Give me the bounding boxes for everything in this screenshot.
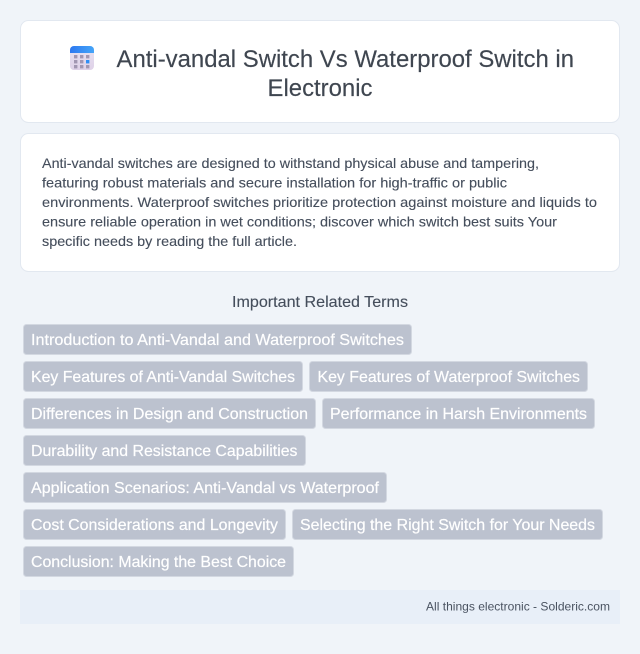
tag: conclusion: [24, 546, 294, 576]
title: Anti-vandal Switch Vs Waterproof Switch in: [116, 46, 574, 73]
tag: anti-vandal features: Key Features of Anti-Vandal Switches: [31, 369, 295, 386]
tag: cost: Cost Considerations and Longevity: [31, 517, 278, 534]
tag: conclusion: Conclusion: Making the Best Choice: [31, 554, 286, 571]
panel: term tags: [24, 324, 602, 576]
tag: harsh environments: Performance in Harsh Environments: [330, 406, 587, 423]
tag: application scenarios: [24, 472, 386, 502]
tag: harsh environments: [322, 398, 594, 428]
text block: description: specific needs by reading the full article.: [42, 233, 297, 249]
footer: All things electronic - Solderic.com: [426, 600, 610, 614]
tag: anti-vandal features: [24, 362, 302, 392]
title: Electronic: [268, 75, 372, 102]
panel: description card: [20, 134, 620, 272]
panel: title card: [20, 20, 620, 122]
tag: selecting: [292, 510, 602, 540]
heading: related terms: Important Related Terms: [232, 294, 408, 311]
tag: cost: [24, 510, 286, 540]
tag: waterproof features: [310, 362, 588, 392]
icon: calendar: [70, 46, 94, 70]
tag: design differences: Differences in Design and Construction: [31, 406, 308, 423]
tag: selecting: Selecting the Right Switch for Your Needs: [300, 517, 595, 534]
tag: application scenarios: Application Scenarios: Anti-Vandal vs Waterproof: [31, 480, 380, 497]
footer: [20, 590, 620, 624]
tag: durability: [24, 436, 306, 466]
text block: description: ensure reliable operation in wet conditions; discover which switch best suits Your: [42, 214, 557, 230]
text block: description: featuring robust materials and secure installation for high-traffic or public: [42, 174, 507, 190]
tag: durability: Durability and Resistance Capabilities: [31, 443, 298, 460]
tag: design differences: [24, 398, 316, 428]
text block: description: environments. Waterproof switches prioritize protection against moisture and liquids to: [42, 194, 597, 210]
text block: description: Anti-vandal switches are designed to withstand physical abuse and tampering,: [42, 155, 539, 171]
tag: introduction: [24, 324, 412, 354]
tag: introduction: Introduction to Anti-Vandal and Waterproof Switches: [31, 332, 404, 349]
tag: waterproof features: Key Features of Waterproof Switches: [318, 369, 580, 386]
